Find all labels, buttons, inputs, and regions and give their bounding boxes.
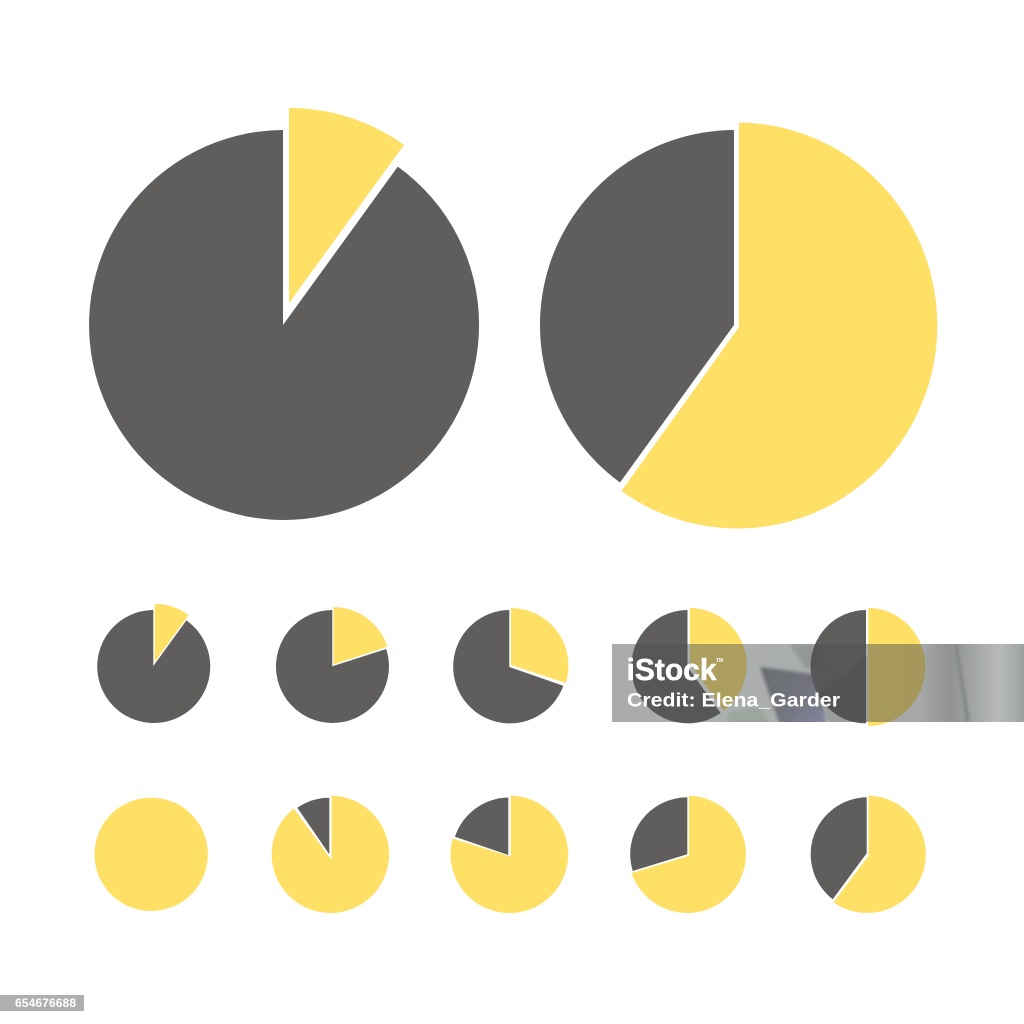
small pie: fifty percent <box>810 608 925 726</box>
small pie: forty percent <box>631 608 747 723</box>
yellow slice <box>622 122 937 528</box>
small pie: ten percent <box>97 604 210 723</box>
small pie: eighty percent yellow <box>451 796 568 913</box>
gray slice <box>540 130 734 482</box>
stock id tag: 654676688 <box>15 996 76 1010</box>
gray slice <box>89 130 479 520</box>
small pie: ninety percent yellow <box>272 796 389 913</box>
small pie: fully yellow circle <box>94 798 208 911</box>
stock id tag <box>0 995 84 1011</box>
large pie chart: sixty percent yellow <box>540 122 937 528</box>
small pie: seventy percent yellow <box>630 796 746 913</box>
watermark logo: iStock <box>626 652 717 687</box>
small pie: sixty percent yellow <box>811 796 926 913</box>
watermark banner <box>612 644 1024 726</box>
small pie: thirty percent <box>453 608 568 723</box>
yellow slice <box>289 108 404 303</box>
trademark symbol: TM <box>716 658 723 664</box>
large pie chart: ten percent yellow slice <box>89 108 479 520</box>
small pie: twenty percent <box>276 607 389 723</box>
banner texture <box>728 644 970 726</box>
photographer credit: Credit: Elena_Garder <box>627 690 841 712</box>
